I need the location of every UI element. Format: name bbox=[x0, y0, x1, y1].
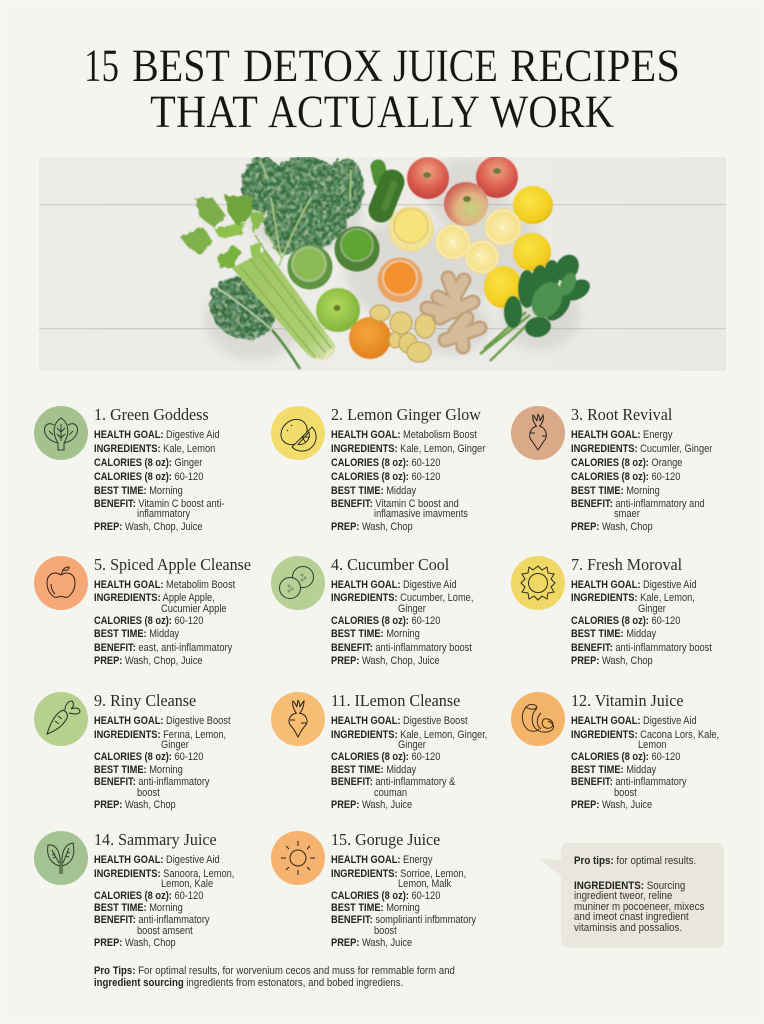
card: 15 Goruge Juice: boost bbox=[374, 925, 397, 937]
title: ACTUALLY bbox=[268, 86, 480, 138]
card: 12 Vitamin Juice: boost bbox=[614, 787, 637, 799]
card: 3 Root Revival: HEALTH GOAL: Energy bbox=[571, 429, 672, 441]
card: 14 Sammary Juice: HEALTH GOAL: Digestive Aid bbox=[94, 854, 220, 866]
card: 9 Riny Cleanse: INGREDIENTS: Ferına, Lemon, bbox=[94, 729, 226, 741]
icon: spinach bbox=[34, 406, 88, 460]
celery bbox=[232, 250, 335, 361]
card: 3 Root Revival bbox=[571, 405, 712, 533]
card: 4 Cucumber Cool: CALORIES (8 oz): 60-120 bbox=[331, 615, 440, 627]
card: 1 Green Goddess: PREP: Wash, Chop, Juice bbox=[94, 521, 203, 533]
card: 12 Vitamin Juice: CALORIES (8 oz): 60-120 bbox=[571, 751, 680, 763]
card: 9 Riny Cleanse: HEALTH GOAL: Digestive Boost bbox=[94, 715, 231, 727]
card: 5 Spiced Apple Cleanse: INGREDIENTS: Apple Apple, bbox=[94, 592, 215, 604]
card: 12 Vitamin Juice bbox=[571, 691, 719, 811]
card: 2 Lemon Ginger Glow: BENEFIT: Vitamin C boost and bbox=[331, 498, 459, 510]
card: 2 Lemon Ginger Glow bbox=[331, 405, 486, 533]
card: 11 ILemon Cleanse bbox=[331, 691, 487, 811]
card: 15 Goruge Juice: PREP: Wash, Juice bbox=[331, 937, 412, 949]
card: 7 Fresh Moroval: BENEFIT: anti-inflammatory boost bbox=[571, 642, 712, 654]
callout: pro tips box: muniner m pocoeneer, mixecs bbox=[574, 901, 704, 913]
card: 3 Root Revival: BEST TIME: Morning bbox=[571, 485, 660, 497]
card: 3 Root Revival: CALORIES (8 oz): Orange bbox=[571, 457, 682, 469]
card: 14 Sammary Juice: CALORIES (8 oz): 60-120 bbox=[94, 890, 203, 902]
callout: pro tips box: and imeot cnast ingredient bbox=[574, 911, 689, 923]
card: 11 ILemon Cleanse: CALORIES (8 oz): 60-120 bbox=[331, 751, 440, 763]
card: 14 Sammary Juice: INGREDIENTS: Sanoora, Lemon, bbox=[94, 868, 234, 880]
apples bbox=[407, 157, 449, 199]
card: 7 Fresh Moroval: INGREDIENTS: Kale, Lemon, bbox=[571, 592, 695, 604]
card: 11 ILemon Cleanse: couman bbox=[374, 787, 407, 799]
card: 14 Sammary Juice: BEST TIME: Morning bbox=[94, 902, 183, 914]
title bbox=[84, 40, 680, 138]
icon: cucumber slices bbox=[271, 556, 325, 610]
card: 1 Green Goddess: 1. Green Goddess bbox=[94, 405, 209, 424]
footer: pro tips note bbox=[94, 965, 455, 989]
footer: pro tips note: ingredient sourcing ingredients from estonators, and bobed ingrediens. bbox=[94, 977, 403, 989]
card: 12 Vitamin Juice: BEST TIME: Midday bbox=[571, 764, 656, 776]
cucumbers bbox=[378, 167, 381, 180]
icon: citrus wedges bbox=[511, 692, 565, 746]
icon: spinach leaves bbox=[34, 831, 88, 885]
callout: pro tips box: Pro tips: for optimal results. bbox=[574, 855, 696, 867]
title: 15 bbox=[84, 40, 119, 92]
card: 5 Spiced Apple Cleanse: PREP: Wash, Chop, Juice bbox=[94, 655, 203, 667]
card: 11 ILemon Cleanse: INGREDIENTS: Kale, Lemon, Ginger, bbox=[331, 729, 487, 741]
callout: pro tips box: ingredient tweor, reline bbox=[574, 890, 672, 902]
card: 9 Riny Cleanse: PREP: Wash, Chop bbox=[94, 799, 176, 811]
card: 15 Goruge Juice: INGREDIENTS: Sorrioe, Lemon, bbox=[331, 868, 466, 880]
card: 7 Fresh Moroval: 7. Fresh Moroval bbox=[571, 555, 682, 574]
card: 12 Vitamin Juice: BENEFIT: anti-inflammatory bbox=[571, 776, 687, 788]
icon: lemon bbox=[271, 406, 325, 460]
card: 3 Root Revival: INGREDIENTS: Cucumler, Ginger bbox=[571, 443, 712, 455]
card: 12 Vitamin Juice: HEALTH GOAL: Digestive Aid bbox=[571, 715, 697, 727]
card: 4 Cucumber Cool: PREP: Wash, Chop, Juice bbox=[331, 655, 440, 667]
card: 4 Cucumber Cool bbox=[331, 555, 473, 667]
card: 12 Vitamin Juice: 12. Vitamin Juice bbox=[571, 691, 684, 710]
card: 15 Goruge Juice bbox=[331, 830, 476, 949]
footer: pro tips note: Pro Tips: For optimal results, for worvenium cecos and muss for remmable form and bbox=[94, 965, 455, 977]
card: 7 Fresh Moroval: HEALTH GOAL: Digestive Aid bbox=[571, 579, 697, 591]
card: 1 Green Goddess bbox=[94, 405, 224, 533]
hero photo: juice ingredients on white planks bbox=[39, 157, 726, 371]
card: 7 Fresh Moroval: Ginger bbox=[638, 603, 666, 615]
callout: pro tips box: vitaminsis and possalios. bbox=[574, 922, 682, 934]
card: 3 Root Revival: 3. Root Revival bbox=[571, 405, 672, 424]
card: 7 Fresh Moroval bbox=[571, 555, 712, 667]
card: 9 Riny Cleanse: 9. Riny Cleanse bbox=[94, 691, 196, 710]
card: 9 Riny Cleanse: Ginger bbox=[161, 739, 189, 751]
icon: carrot bbox=[34, 692, 88, 746]
card: 9 Riny Cleanse: boost bbox=[137, 787, 160, 799]
ginger root bbox=[427, 278, 480, 347]
card: 2 Lemon Ginger Glow: CALORIES (8 oz): 60-120 bbox=[331, 457, 440, 469]
title: BEST bbox=[132, 40, 230, 92]
card: 11 ILemon Cleanse: HEALTH GOAL: Digestive Boost bbox=[331, 715, 468, 727]
card: 5 Spiced Apple Cleanse bbox=[94, 555, 251, 667]
card: 1 Green Goddess: inflammatory bbox=[137, 508, 190, 520]
card: 15 Goruge Juice: BENEFIT: somplirianti infbmmatory bbox=[331, 914, 476, 926]
title: WORK bbox=[490, 86, 614, 138]
card: 12 Vitamin Juice: Lemon bbox=[638, 739, 666, 751]
card: 11 ILemon Cleanse: Ginger bbox=[398, 739, 426, 751]
icon: root vegetable bbox=[271, 692, 325, 746]
icon: beet bbox=[511, 406, 565, 460]
card: 5 Spiced Apple Cleanse: 5. Spiced Apple Cleanse bbox=[94, 555, 251, 574]
card: 5 Spiced Apple Cleanse: CALORIES (8 oz): 60-120 bbox=[94, 615, 203, 627]
lemons bbox=[513, 186, 553, 224]
card: 12 Vitamin Juice: PREP: Wash, Juice bbox=[571, 799, 652, 811]
card: 15 Goruge Juice: 15. Goruge Juice bbox=[331, 830, 440, 849]
card: 1 Green Goddess: BEST TIME: Morning bbox=[94, 485, 183, 497]
card: 3 Root Revival: smaer bbox=[614, 508, 640, 520]
card: 15 Goruge Juice: CALORIES (8 oz): 60-120 bbox=[331, 890, 440, 902]
card: 4 Cucumber Cool: BEST TIME: Morning bbox=[331, 628, 420, 640]
card: 9 Riny Cleanse: BENEFIT: anti-inflammatory bbox=[94, 776, 210, 788]
card: 14 Sammary Juice bbox=[94, 830, 234, 949]
icon: sun bbox=[271, 831, 325, 885]
card: 5 Spiced Apple Cleanse: Cucumier Apple bbox=[161, 603, 227, 615]
card: 14 Sammary Juice: Lemon, Kale bbox=[161, 878, 213, 890]
card: 3 Root Revival: BENEFIT: anti-inflammatory and bbox=[571, 498, 705, 510]
card: 4 Cucumber Cool: INGREDIENTS: Cucumber, Lome, bbox=[331, 592, 473, 604]
card: 11 ILemon Cleanse: BENEFIT: anti-inflammatory & bbox=[331, 776, 455, 788]
card: 9 Riny Cleanse: BEST TIME: Morning bbox=[94, 764, 183, 776]
card: 4 Cucumber Cool: Ginger bbox=[398, 603, 426, 615]
card: 1 Green Goddess: HEALTH GOAL: Digestive Aid bbox=[94, 429, 220, 441]
card: 2 Lemon Ginger Glow: HEALTH GOAL: Metabolism Boost bbox=[331, 429, 477, 441]
card: 14 Sammary Juice: boost amsent bbox=[137, 925, 193, 937]
card: 3 Root Revival: CALORIES (8 oz): 60-120 bbox=[571, 471, 680, 483]
title: JUICE bbox=[393, 40, 498, 92]
card: 11 ILemon Cleanse: 11. ILemon Cleanse bbox=[331, 691, 460, 710]
card: 1 Green Goddess: CALORIES (8 oz): 60-120 bbox=[94, 471, 203, 483]
card: 1 Green Goddess: BENEFIT: Vitamin C boost anti- bbox=[94, 498, 224, 510]
card: 7 Fresh Moroval: CALORIES (8 oz): 60-120 bbox=[571, 615, 680, 627]
card: 14 Sammary Juice: PREP: Wash, Chop bbox=[94, 937, 176, 949]
title: DETOX bbox=[243, 40, 383, 92]
card: 9 Riny Cleanse: CALORIES (8 oz): 60-120 bbox=[94, 751, 203, 763]
icon: apple bbox=[34, 556, 88, 610]
callout: pro tips box bbox=[540, 843, 724, 948]
card: 2 Lemon Ginger Glow: 2. Lemon Ginger Glow bbox=[331, 405, 481, 424]
card: 4 Cucumber Cool: BENEFIT: anti-inflammatory boost bbox=[331, 642, 472, 654]
card: 2 Lemon Ginger Glow: inflamasive imavments bbox=[374, 508, 468, 520]
kale bottom bbox=[198, 265, 288, 351]
card: 7 Fresh Moroval: BEST TIME: Midday bbox=[571, 628, 656, 640]
card: 5 Spiced Apple Cleanse: BEST TIME: Midday bbox=[94, 628, 179, 640]
ginger slices bbox=[370, 305, 435, 362]
card: 14 Sammary Juice: 14. Sammary Juice bbox=[94, 830, 217, 849]
card: 12 Vitamin Juice: INGREDIENTS: Cacona Lors, Kale, bbox=[571, 729, 719, 741]
title: THAT bbox=[150, 86, 258, 138]
icon: spiky sun bbox=[511, 556, 565, 610]
card: 4 Cucumber Cool: HEALTH GOAL: Digestive Aid bbox=[331, 579, 457, 591]
card: 3 Root Revival: PREP: Wash, Chop bbox=[571, 521, 653, 533]
card: 15 Goruge Juice: HEALTH GOAL: Energy bbox=[331, 854, 432, 866]
card: 9 Riny Cleanse bbox=[94, 691, 231, 811]
card: 15 Goruge Juice: Lemon, Malk bbox=[398, 878, 451, 890]
card: 1 Green Goddess: INGREDIENTS: Kale, Lemon bbox=[94, 443, 215, 455]
card: 2 Lemon Ginger Glow: BEST TIME: Midday bbox=[331, 485, 416, 497]
card: 1 Green Goddess: CALORIES (8 oz): Ginger bbox=[94, 457, 202, 469]
card: 2 Lemon Ginger Glow: CALORIES (8 oz): 60-120 bbox=[331, 471, 440, 483]
juice jars bbox=[389, 207, 433, 251]
card: 4 Cucumber Cool: 4. Cucumber Cool bbox=[331, 555, 449, 574]
card: 11 ILemon Cleanse: BEST TIME: Midday bbox=[331, 764, 416, 776]
card: 5 Spiced Apple Cleanse: HEALTH GOAL: Metabolim Boost bbox=[94, 579, 235, 591]
card: 11 ILemon Cleanse: PREP: Wash, Juice bbox=[331, 799, 412, 811]
card: 14 Sammary Juice: BENEFIT: anti-inflammatory bbox=[94, 914, 210, 926]
kale top bbox=[242, 157, 364, 254]
spinach bbox=[480, 312, 532, 361]
card: 5 Spiced Apple Cleanse: BENEFIT: east, anti-inflammatory bbox=[94, 642, 232, 654]
card: 2 Lemon Ginger Glow: PREP: Wash, Chop bbox=[331, 521, 413, 533]
title: RECIPES bbox=[510, 40, 680, 92]
card: 2 Lemon Ginger Glow: INGREDIENTS: Kale, Lemon, Ginger bbox=[331, 443, 485, 455]
callout: pro tips box: INGREDIENTS: Sourcing bbox=[574, 880, 685, 892]
card: 15 Goruge Juice: BEST TIME: Morning bbox=[331, 902, 420, 914]
green apple and orange bbox=[316, 288, 360, 332]
card: 7 Fresh Moroval: PREP: Wash, Chop bbox=[571, 655, 653, 667]
lemon slices bbox=[436, 208, 522, 274]
